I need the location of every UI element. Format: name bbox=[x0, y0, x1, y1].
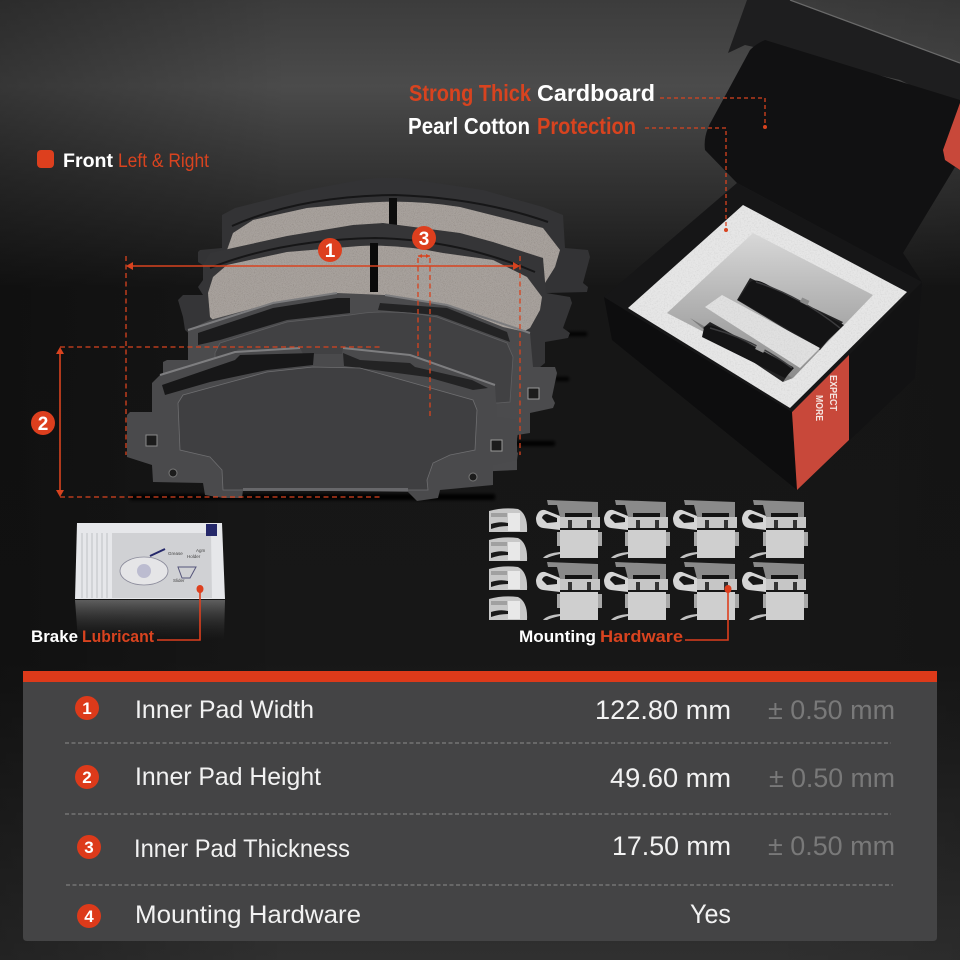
row 4: mounting hardware bbox=[77, 899, 731, 929]
row 1: inner pad width: 1 bbox=[82, 699, 92, 718]
brake lubricant packet bbox=[75, 523, 225, 640]
packet crimp stripes bbox=[82, 533, 107, 598]
dimension 1: width arrow: 1 bbox=[325, 241, 336, 262]
box red band: MORE bbox=[813, 395, 824, 421]
brake pads stack bbox=[127, 178, 590, 501]
pad shadows bbox=[130, 332, 587, 500]
label: pearl cotton protection: Protection bbox=[537, 113, 636, 139]
row 4: mounting hardware: 4 bbox=[84, 907, 94, 926]
callout: mounting hardware: Hardware bbox=[600, 627, 683, 646]
callout: brake lubricant: Brake bbox=[31, 627, 78, 646]
row 1: inner pad width: ± 0.50 mm bbox=[768, 695, 895, 725]
label: pearl cotton protection bbox=[408, 113, 636, 139]
packet reflection bbox=[75, 600, 225, 640]
legend: front left and right: Left & Right bbox=[118, 151, 210, 172]
pad 1: front backing plate bbox=[127, 348, 519, 501]
row 1: inner pad width bbox=[75, 695, 895, 725]
dashed callout: cardboard bbox=[660, 98, 767, 129]
callout: mounting hardware bbox=[519, 585, 732, 646]
box left face bbox=[604, 297, 797, 490]
pad 3: second friction pad bbox=[178, 223, 572, 400]
row 3: inner pad thickness: ± 0.50 mm bbox=[768, 831, 895, 861]
packet foil panel with diagram: Slider bbox=[173, 578, 185, 583]
row 3: inner pad thickness: Inner Pad Thickness bbox=[134, 835, 350, 863]
packet foil panel with diagram: Agm bbox=[196, 548, 206, 553]
row 1: inner pad width: 122.80 mm bbox=[595, 695, 731, 725]
label: strong thick cardboard: Strong Thick bbox=[409, 80, 531, 106]
row 3: inner pad thickness: 17.50 mm bbox=[612, 831, 731, 861]
pads inside the box bbox=[702, 280, 844, 378]
box right face bbox=[792, 282, 922, 490]
callout: brake lubricant bbox=[31, 585, 204, 646]
row 4: mounting hardware: Yes bbox=[690, 899, 731, 929]
dimension 2: height arrow: 2 bbox=[38, 414, 48, 435]
row 2: inner pad height: 2 bbox=[82, 768, 92, 787]
dashed callout: foam bbox=[645, 128, 728, 232]
packet foil panel with diagram: Holder bbox=[187, 554, 201, 559]
box inner rim bbox=[604, 183, 922, 412]
dimension 3: thickness arrow: 3 bbox=[419, 229, 429, 250]
packet blue mark bbox=[206, 524, 217, 536]
label: pearl cotton protection: Pearl Cotton bbox=[408, 113, 530, 139]
row 3: inner pad thickness bbox=[77, 831, 895, 863]
table red header bar bbox=[23, 671, 937, 682]
dimension 3: thickness arrow bbox=[412, 226, 436, 419]
product box bbox=[604, 0, 960, 490]
callout: mounting hardware: Mounting bbox=[519, 627, 596, 646]
label: strong thick cardboard: Cardboard bbox=[537, 80, 655, 106]
packet foil panel with diagram bbox=[112, 533, 212, 598]
row 3: inner pad thickness: 3 bbox=[84, 838, 94, 857]
legend: front left and right bbox=[37, 150, 210, 172]
table body bbox=[23, 671, 937, 941]
box red band: EXPECT bbox=[827, 375, 838, 411]
row 4: mounting hardware: Mounting Hardware bbox=[135, 901, 361, 929]
dimension 2: height arrow bbox=[31, 347, 380, 497]
box red band bbox=[792, 353, 849, 490]
legend: front left and right: Front bbox=[63, 151, 114, 172]
pearl cotton foam bbox=[628, 205, 907, 408]
box lid bbox=[705, 0, 960, 282]
packet body bbox=[75, 523, 225, 599]
callout: brake lubricant: Lubricant bbox=[82, 627, 154, 646]
row 1: inner pad width: Inner Pad Width bbox=[135, 696, 314, 724]
pad 4: rear friction pad bbox=[198, 178, 590, 320]
row 2: inner pad height: Inner Pad Height bbox=[135, 763, 321, 791]
row 2: inner pad height: ± 0.50 mm bbox=[769, 763, 895, 793]
label: strong thick cardboard bbox=[409, 80, 655, 106]
mounting hardware clips bbox=[489, 500, 808, 620]
panel: specifications table bbox=[23, 671, 937, 941]
row 2: inner pad height: 49.60 mm bbox=[610, 763, 731, 793]
pad 2: second backing plate bbox=[163, 293, 557, 480]
packet foil panel with diagram: Grease bbox=[168, 551, 183, 556]
row 2: inner pad height bbox=[75, 763, 895, 793]
dimension 1: width arrow bbox=[126, 238, 520, 455]
